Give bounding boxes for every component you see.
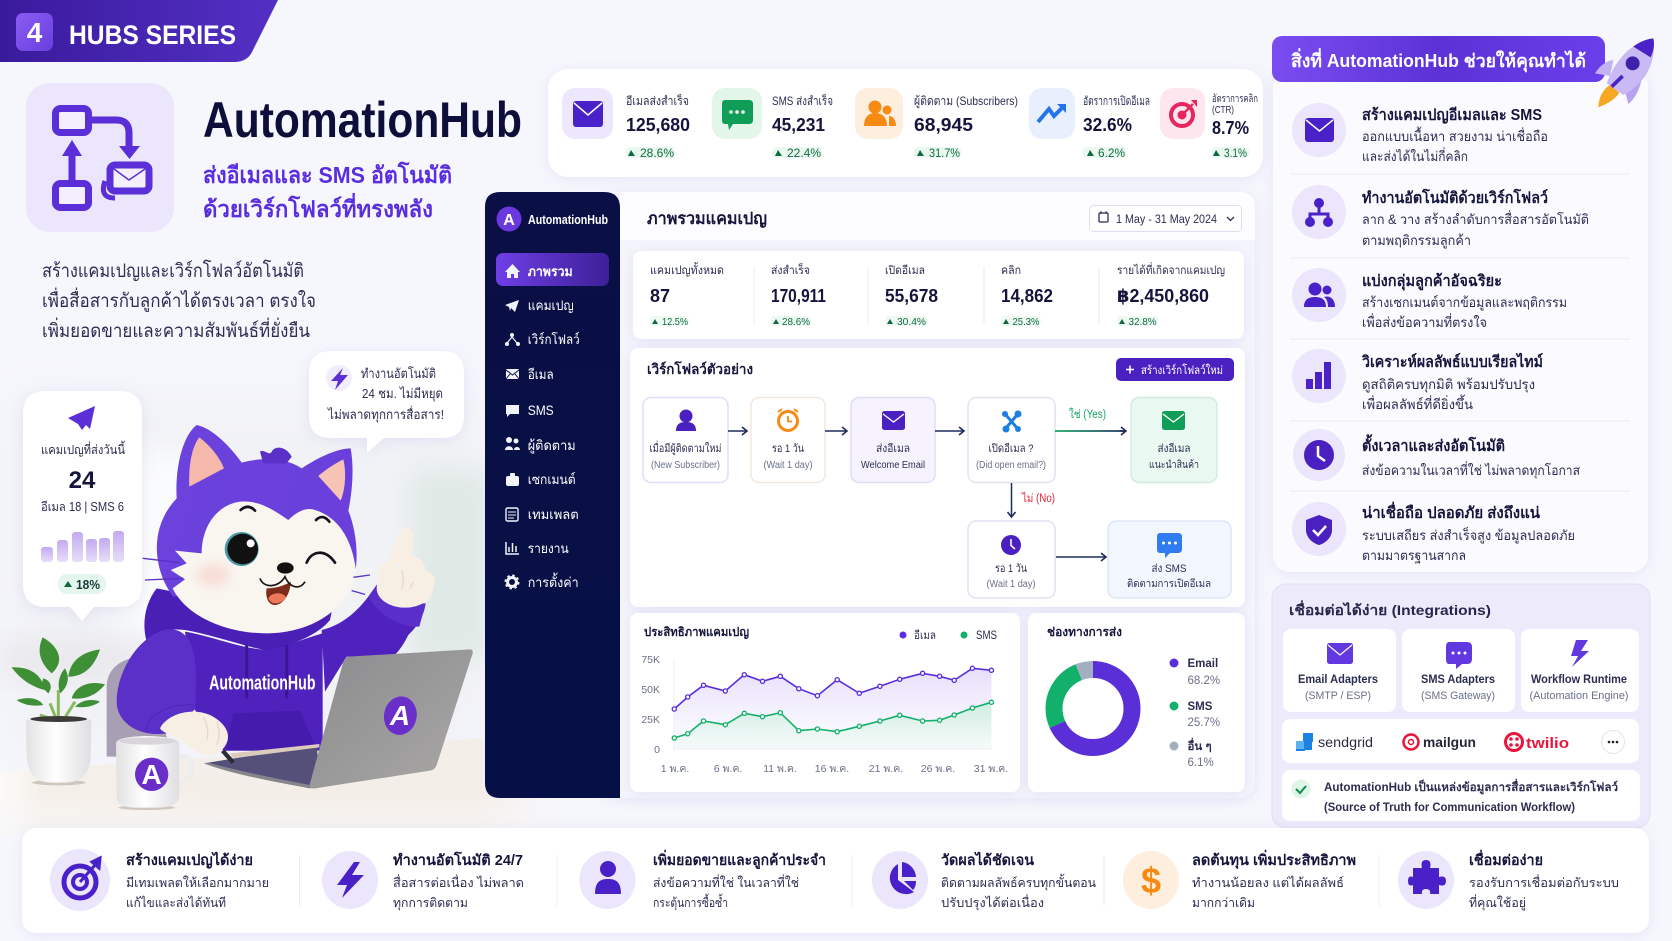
brand: AutomationHub <box>528 212 608 227</box>
metric: open rate <box>1029 88 1150 160</box>
card: workflow runtime: (Automation Engine) <box>1530 690 1628 702</box>
capability: segmentation: แบ่งกลุ่มลูกค้าอัจฉริยะ <box>1362 272 1502 292</box>
benefit: cost: ทำงานน้อยลง แต่ได้ผลลัพธ์ <box>1192 876 1344 890</box>
donut legend: SMS <box>1188 701 1213 713</box>
benefit: cost: มากกว่าเดิม <box>1192 896 1255 910</box>
branch label yes: ใช่ (Yes) <box>1069 408 1106 421</box>
kpi: revenue: 32.8% <box>1128 316 1156 328</box>
capability: scheduling <box>1293 429 1580 481</box>
capability: workflow: ลาก & วาง สร้างลำดับการสื่อสารอัตโนมัติ <box>1362 210 1589 227</box>
capabilities header pill: สิ่งที่ AutomationHub ช่วยให้คุณทำได้ <box>1291 48 1586 73</box>
node: sms follow up: ส่ง SMS <box>1152 563 1186 575</box>
axis labels: 75K <box>641 654 660 666</box>
benefit: automation <box>322 851 524 911</box>
nav labels: รายงาน <box>528 541 569 556</box>
benefit: automation: ทำงานอัตโนมัติ 24/7 <box>393 851 523 869</box>
intro paragraph: สร้างแคมเปญและเวิร์กโฟลว์อัตโนมัติ <box>42 259 304 282</box>
panel: delivery channels <box>1028 613 1245 792</box>
heading: ภาพรวมแคมเปญ <box>647 210 767 229</box>
kpi: opened: 55,678 <box>885 286 938 306</box>
node: opened email decision <box>968 398 1055 482</box>
nav labels: การตั้งค่า <box>528 572 579 590</box>
donut legend: 68.2% <box>1188 675 1220 687</box>
mini bar chart <box>41 531 124 562</box>
panel: top metrics <box>548 69 1263 177</box>
node: wait 1 day branch: รอ 1 วัน <box>995 563 1027 575</box>
axis labels: 11 พ.ค. <box>763 763 797 775</box>
chart heading: ประสิทธิภาพแคมเปญ <box>644 625 749 639</box>
kpi: all campaigns: แคมเปญทั้งหมด <box>650 262 724 277</box>
logo: twilio: twilio <box>1526 735 1569 752</box>
chart legend: SMS <box>976 630 997 642</box>
panel: campaign performance chart <box>630 613 1020 792</box>
node: new subscriber <box>643 398 728 482</box>
card: sms adapters <box>1402 629 1515 712</box>
nav labels: ผู้ติดตาม <box>528 438 576 454</box>
line chart: email <box>674 668 991 749</box>
icon: bolt <box>326 365 352 391</box>
metric: subscribers: ผู้ติดตาม (Subscribers) <box>914 94 1018 109</box>
capability: campaigns: ออกแบบเนื้อหา สวยงาม น่าเชื่อถือ <box>1362 126 1548 144</box>
donut legend: Email <box>1188 658 1218 670</box>
series banner <box>0 0 278 62</box>
donut chart <box>1054 670 1132 748</box>
benefit: integrations: เชื่อมต่อง่าย <box>1469 849 1543 869</box>
capability: reliability: ตามมาตรฐานสากล <box>1362 548 1466 564</box>
stat text <box>41 440 125 514</box>
brand <box>496 206 608 232</box>
kpi: clicks: คลิก <box>1001 264 1021 277</box>
mascot illustration <box>12 425 473 810</box>
plant <box>12 637 105 720</box>
eye <box>225 532 259 566</box>
card: sms adapters: (SMS Gateway) <box>1421 690 1495 702</box>
benefit: sales: เพิ่มยอดขายและลูกค้าประจำ <box>653 849 826 869</box>
axis labels: 1 พ.ค. <box>661 763 689 775</box>
source of truth note: (Source of Truth for Communication Workflow) <box>1324 802 1575 814</box>
benefit: sales: ส่งข้อความที่ใช่ ในเวลาที่ใช่ <box>653 874 799 890</box>
node: wait 1 day branch <box>968 521 1055 598</box>
kpi: revenue: รายได้ที่เกิดจากแคมเปญ <box>1117 262 1225 277</box>
kpi: clicks: 14,862 <box>1001 286 1053 306</box>
benefit: measurable: ปรับปรุงได้ต่อเนื่อง <box>941 894 1044 911</box>
icon: paper plane <box>68 406 95 430</box>
chair <box>107 657 173 757</box>
metric: click rate: 8.7% <box>1212 118 1249 138</box>
mug: A <box>142 759 162 790</box>
benefit: measurable <box>872 851 1096 911</box>
growth pill: 18% <box>76 578 100 592</box>
capability: segmentation: เพื่อส่งข้อความที่ตรงใจ <box>1362 313 1487 330</box>
source of truth note <box>1282 770 1640 821</box>
stat text: อีเมล 18 | SMS 6 <box>41 500 124 514</box>
card: email adapters: Email Adapters <box>1298 674 1378 686</box>
kpi: opened <box>885 264 938 328</box>
date selector: 1 May - 31 May 2024 <box>1116 214 1218 226</box>
pointing hand <box>377 527 435 608</box>
benefit: easy campaigns: แก้ไขและส่งได้ทันที <box>126 896 226 910</box>
donut legend <box>1170 658 1220 769</box>
date selector <box>1090 206 1242 232</box>
banner text: HUBS SERIES <box>69 20 236 50</box>
benefit: measurable: ติดตามผลลัพธ์ครบทุกขั้นตอน <box>941 873 1096 891</box>
chart legend <box>900 629 997 642</box>
channels heading: ช่องทางการส่ง <box>1047 625 1122 639</box>
benefit: easy campaigns <box>50 849 269 911</box>
benefit: automation: ทุกการติดตาม <box>393 896 468 911</box>
badge number 4: 4 <box>27 17 43 48</box>
axis labels: 16 พ.ค. <box>815 763 849 775</box>
laptop: A <box>389 700 410 731</box>
capability: campaigns <box>1292 103 1548 164</box>
capability: scheduling: ส่งข้อความในเวลาที่ใช่ ไม่พลาดทุกโอกาส <box>1362 461 1580 479</box>
panel: workflow example <box>630 348 1245 607</box>
capability: reliability: ระบบเสถียร ส่งสำเร็จสูง ข้อมูลปลอดภัย <box>1362 526 1575 544</box>
capability: workflow: ทำงานอัตโนมัติด้วยเวิร์กโฟลว์ <box>1362 188 1548 207</box>
metric: email sent: 28.6% <box>640 148 674 160</box>
capability: analytics: ดูสถิติครบทุกมิติ พร้อมปรับปรุง <box>1362 377 1535 393</box>
card: sms adapters: SMS Adapters <box>1421 674 1495 686</box>
head <box>143 425 370 633</box>
metric: sms sent: 22.4% <box>787 148 821 160</box>
source of truth note: AutomationHub เป็นแหล่งข้อมูลการสื่อสารและเวิร์กโฟลว์ <box>1324 778 1618 795</box>
kpi: all campaigns <box>650 262 724 328</box>
callout text: 24 ชม. ไม่มีหยุด <box>362 386 443 402</box>
capability: segmentation <box>1292 268 1567 330</box>
hoodie wordmark: AutomationHub <box>209 673 315 695</box>
button: create workflow <box>1116 358 1234 381</box>
kpi: all campaigns: 12.5% <box>662 316 688 328</box>
kpi: delivered: ส่งสำเร็จ <box>771 262 810 277</box>
metric: click rate <box>1160 88 1258 160</box>
node: welcome email: ส่งอีเมล <box>876 442 910 455</box>
metric: subscribers: 31.7% <box>929 148 960 160</box>
panel: bottom benefits <box>22 828 1649 933</box>
capabilities header pill <box>1272 36 1605 82</box>
callout text <box>327 366 444 423</box>
capability: analytics: วิเคราะห์ผลลัพธ์แบบเรียลไทม์ <box>1362 352 1543 371</box>
pot <box>26 716 91 785</box>
capability: campaigns: และส่งได้ในไม่กี่คลิก <box>1362 147 1468 164</box>
node: opened email decision: เปิดอีเมล ? <box>988 442 1034 455</box>
hood and torso <box>144 588 333 751</box>
logo: sendgrid: sendgrid <box>1318 734 1373 750</box>
badge number 4 <box>16 13 53 51</box>
nav labels: ภาพรวม <box>528 264 573 279</box>
node: new subscriber: (New Subscriber) <box>651 460 720 471</box>
node: product email <box>1131 398 1217 482</box>
panel: integrations <box>1272 584 1650 828</box>
room background scene <box>0 400 560 835</box>
brand: A <box>503 212 515 229</box>
dashboard header <box>620 192 1255 240</box>
line chart: sms <box>674 702 991 749</box>
node: new subscriber: เมื่อมีผู้ติดตามใหม่ <box>650 440 722 455</box>
kpi: opened: 30.4% <box>897 316 926 328</box>
nav labels: เทมเพลต <box>528 507 579 522</box>
metric: email sent: อีเมลส่งสำเร็จ <box>626 93 689 108</box>
panel: sidebar navigation <box>485 192 620 798</box>
capability: scheduling: ตั้งเวลาและส่งอัตโนมัติ <box>1362 434 1505 455</box>
stat text: 24 <box>69 467 96 494</box>
axis labels: 50K <box>641 684 660 696</box>
node: wait 1 day <box>751 398 825 482</box>
benefit: cost: ลดต้นทุน เพิ่มประสิทธิภาพ <box>1192 849 1356 869</box>
benefit: automation: สื่อสารต่อเนื่อง ไม่พลาด <box>393 874 524 890</box>
axis labels: 21 พ.ค. <box>869 763 903 775</box>
node: wait 1 day branch: (Wait 1 day) <box>986 579 1036 590</box>
capability: campaigns: สร้างแคมเปญอีเมลและ SMS <box>1362 106 1542 124</box>
benefit: sales <box>580 849 826 911</box>
kpi: opened: เปิดอีเมล <box>885 264 925 277</box>
logo strip <box>1282 719 1639 763</box>
intro paragraph: เพื่อสื่อสารกับลูกค้าได้ตรงเวลา ตรงใจ <box>42 287 316 312</box>
metric: click rate: อัตราการคลิก <box>1212 93 1258 105</box>
panel: campaign KPIs <box>633 251 1244 339</box>
capability: workflow <box>1292 185 1589 249</box>
growth pill <box>58 574 106 594</box>
kpi: revenue <box>1117 262 1225 328</box>
card: email adapters <box>1283 629 1396 712</box>
nav labels: เซกเมนต์ <box>528 471 576 487</box>
kpi: delivered: 170,911 <box>771 286 826 306</box>
workflow arrows <box>728 431 1126 557</box>
right arm <box>322 585 426 692</box>
sleeve cuff <box>147 705 193 733</box>
card: email adapters: (SMTP / ESP) <box>1305 690 1371 702</box>
node: welcome email <box>851 398 935 482</box>
logo: twilio <box>1506 734 1569 752</box>
button: create workflow: สร้างเวิร์กโฟลว์ใหม่ <box>1141 363 1223 377</box>
stat text: แคมเปญที่ส่งวันนี้ <box>41 440 125 457</box>
node: wait 1 day: (Wait 1 day) <box>764 460 812 471</box>
capability: analytics: เพื่อผลลัพธ์ที่ดียิ่งขึ้น <box>1362 394 1473 412</box>
mug <box>116 736 192 810</box>
nav labels: อีเมล <box>528 367 554 382</box>
intro paragraph <box>42 259 316 342</box>
donut legend: 25.7% <box>1188 717 1220 729</box>
kpi: delivered <box>771 262 826 328</box>
icon: rocket <box>1595 38 1654 107</box>
left sleeve <box>117 629 196 734</box>
node: sms follow up: ติดตามการเปิดอีเมล <box>1127 577 1211 590</box>
capability: workflow: ตามพฤติกรรมลูกค้า <box>1362 233 1471 249</box>
benefit: easy campaigns: สร้างแคมเปญได้ง่าย <box>126 851 253 869</box>
metric: click rate: 3.1% <box>1224 148 1247 160</box>
metric: sms sent: 45,231 <box>772 115 825 135</box>
laptop <box>204 649 473 788</box>
subtitle: ส่งอีเมลและ SMS อัตโนมัติ <box>203 161 452 188</box>
axis labels: 6 พ.ค. <box>714 763 742 775</box>
panel: dashboard background <box>600 192 1255 798</box>
capability: reliability <box>1292 501 1575 564</box>
active nav item <box>496 253 609 286</box>
subtitle: ด้วยเวิร์กโฟลว์ที่ทรงพลัง <box>203 192 433 222</box>
kpi: clicks <box>1001 264 1053 328</box>
donut legend: อื่น ๆ <box>1187 737 1212 753</box>
nav icons <box>505 264 520 588</box>
logo: sendgrid <box>1296 733 1373 751</box>
branch label no: ไม่ (No) <box>1021 492 1055 505</box>
benefit: cost: $ <box>1141 860 1161 901</box>
axis labels: 0 <box>654 744 660 756</box>
nav labels: แคมเปญ <box>528 298 574 313</box>
callout text: ทำงานอัตโนมัติ <box>361 366 436 381</box>
intro paragraph: เพิ่มยอดขายและความสัมพันธ์ที่ยั่งยืน <box>42 317 310 342</box>
axis labels <box>641 654 1008 775</box>
donut legend: 6.1% <box>1188 757 1214 769</box>
kpi: revenue: ฿2,450,860 <box>1117 286 1209 306</box>
node: product email: ส่งอีเมล <box>1158 442 1190 455</box>
node: wait 1 day: รอ 1 วัน <box>772 443 804 455</box>
axis labels: 25K <box>641 714 660 726</box>
benefit: integrations: ที่คุณใช้อยู่ <box>1469 894 1526 911</box>
callout text: ไม่พลาดทุกการสื่อสาร! <box>327 406 444 423</box>
metric: subscribers <box>855 88 1018 160</box>
face <box>171 501 356 633</box>
metric: open rate: 32.6% <box>1083 115 1132 135</box>
subtitle <box>203 161 452 222</box>
benefit: cost <box>1123 849 1356 910</box>
metric: subscribers: 68,945 <box>914 115 973 135</box>
metric: open rate: อัตราการเปิดอีเมล <box>1083 94 1150 108</box>
card: workflow runtime: Workflow Runtime <box>1531 674 1627 686</box>
paw and pen <box>160 712 233 763</box>
capability: reliability: น่าเชื่อถือ ปลอดภัย ส่งถึงแน่ <box>1362 501 1540 522</box>
logo: mailgun: mailgun <box>1423 734 1476 750</box>
kpi: clicks: 25.3% <box>1012 316 1040 328</box>
nav labels: เวิร์กโฟลว์ <box>528 331 580 347</box>
node: sms follow up <box>1108 521 1231 598</box>
node: welcome email: Welcome Email <box>861 460 925 471</box>
axis labels: 26 พ.ค. <box>921 763 955 775</box>
benefit: integrations: รองรับการเชื่อมต่อกับระบบ <box>1469 874 1619 890</box>
node: product email: แนะนำสินค้า <box>1149 459 1199 471</box>
callout: 24 hour automation <box>309 351 464 453</box>
product logo tile <box>26 83 174 232</box>
metric: sms sent: SMS ส่งสำเร็จ <box>772 93 833 108</box>
metric: email sent: 125,680 <box>626 115 690 135</box>
main title: AutomationHub <box>203 92 522 148</box>
metric: open rate: 6.2% <box>1098 148 1125 160</box>
metric: email sent <box>562 88 690 160</box>
callout: campaigns sent today <box>23 391 142 621</box>
kpi: all campaigns: 87 <box>650 286 670 306</box>
benefit: measurable: วัดผลได้ชัดเจน <box>941 851 1034 869</box>
nav labels <box>528 264 580 590</box>
integrations heading: เชื่อมต่อได้ง่าย (Integrations) <box>1289 600 1491 618</box>
axis labels: 31 พ.ค. <box>974 763 1008 775</box>
chart legend: อีเมล <box>914 629 936 642</box>
more button <box>1602 730 1624 754</box>
workflow heading: เวิร์กโฟลว์ตัวอย่าง <box>647 360 753 377</box>
benefit: sales: กระตุ้นการซื้อซ้ำ <box>653 893 728 911</box>
node: opened email decision: (Did open email?) <box>976 460 1046 471</box>
panel: capabilities list <box>1273 70 1648 572</box>
kpi: delivered: 28.6% <box>782 316 810 328</box>
nav labels: SMS <box>528 403 554 418</box>
benefit: easy campaigns: มีเทมเพลตให้เลือกมากมาย <box>126 876 269 890</box>
capability: analytics <box>1292 349 1543 412</box>
metric: click rate: (CTR) <box>1212 104 1234 116</box>
card: workflow runtime <box>1521 629 1639 712</box>
metric: sms sent <box>712 88 833 160</box>
benefit: integrations <box>1398 849 1619 911</box>
capability: segmentation: สร้างเซกเมนต์จากข้อมูลและพฤติกรรม <box>1362 294 1567 311</box>
